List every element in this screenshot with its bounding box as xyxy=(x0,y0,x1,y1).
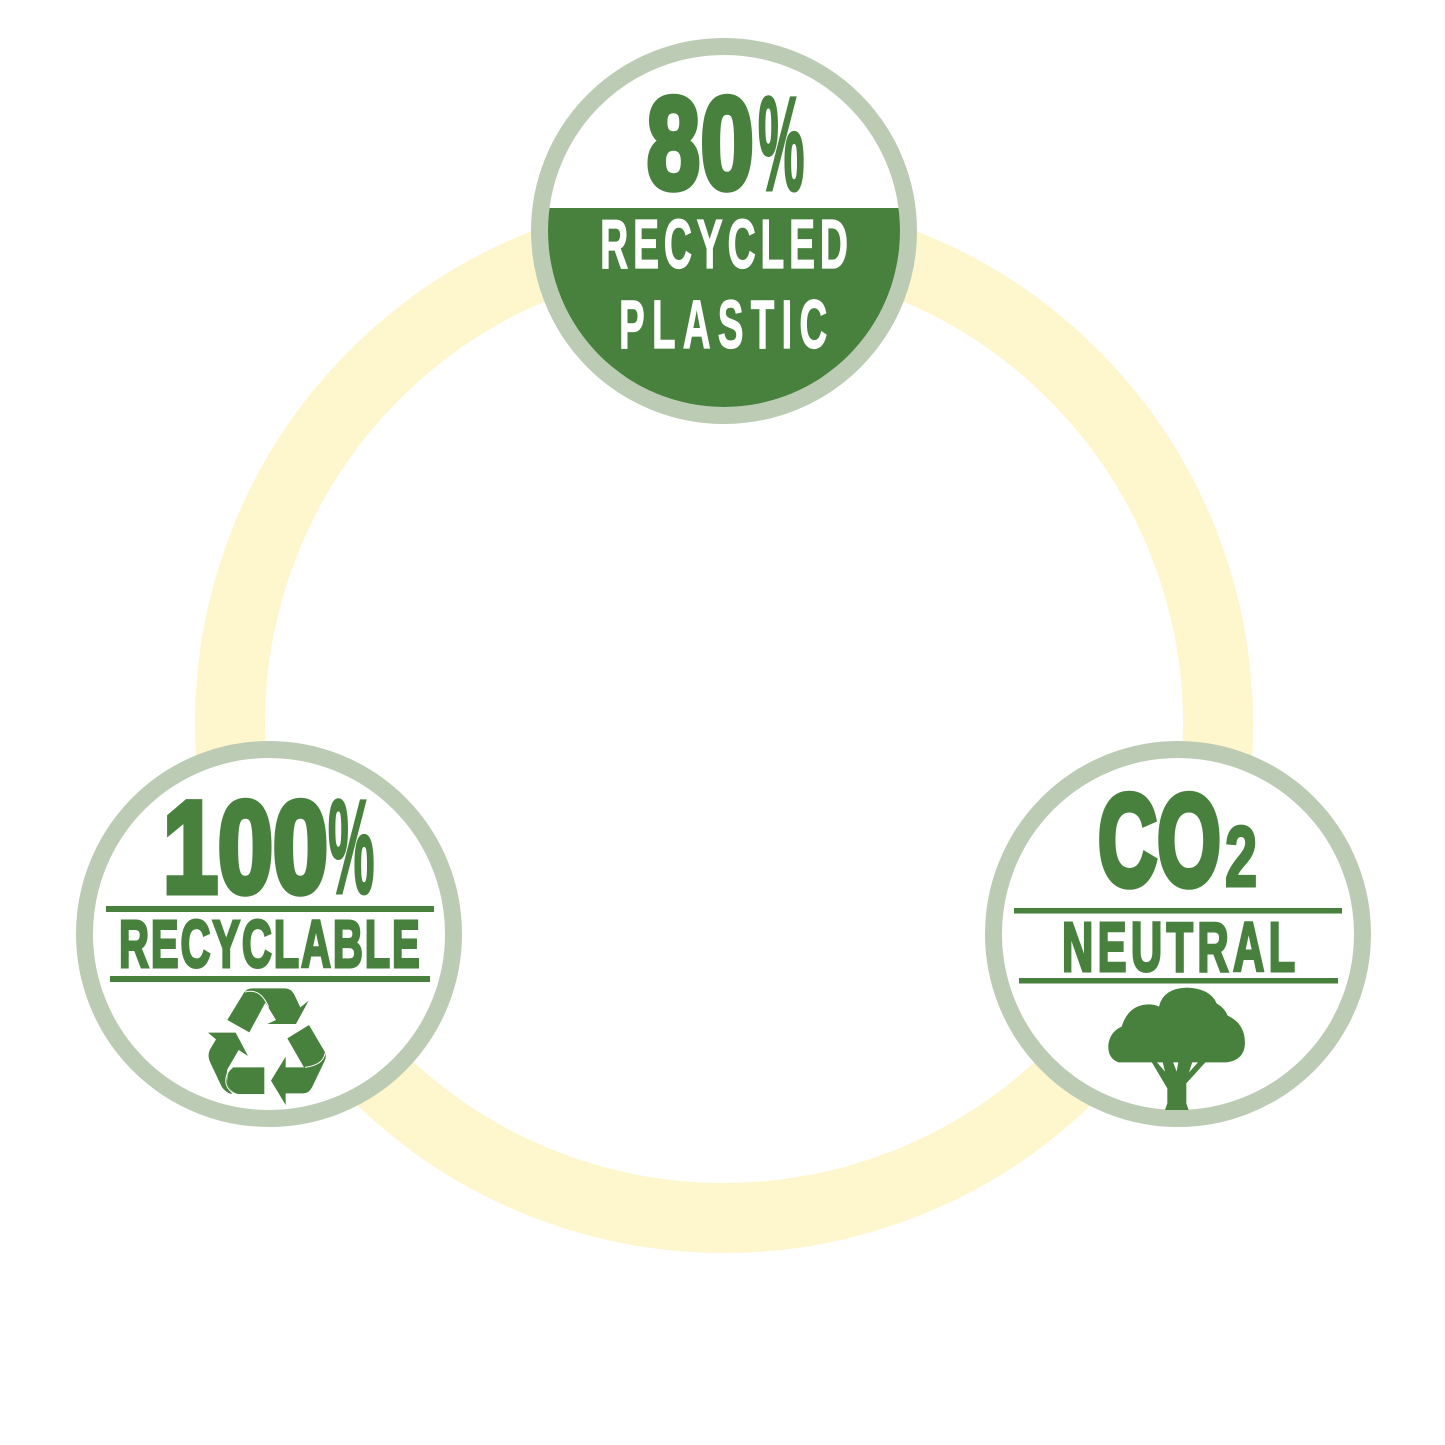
icon: recycling arrows xyxy=(208,988,326,1105)
panel: 80% recycled plastic badge xyxy=(540,46,908,418)
icon: tree xyxy=(1108,988,1245,1110)
upper rule xyxy=(106,906,434,912)
figure: 100%: % xyxy=(328,772,374,922)
badge disc xyxy=(84,750,454,1118)
yellow connecting ring xyxy=(230,230,1218,1218)
figure: 100%: 100 xyxy=(163,775,328,920)
figure: 80%: 80 xyxy=(647,71,754,217)
lower rule xyxy=(1019,978,1338,984)
panel: 100% recyclable badge xyxy=(84,750,454,1118)
label: neutral: NEUTRAL xyxy=(1062,908,1295,987)
figure: CO: CO xyxy=(1098,769,1221,914)
green lower segment xyxy=(540,208,908,418)
lower rule xyxy=(110,976,430,982)
figure: subscript 2: 2 xyxy=(1225,810,1257,905)
label: plastic: PLASTIC xyxy=(619,285,827,363)
label: recycled: RECYCLED xyxy=(600,206,848,284)
badge disc xyxy=(540,46,908,416)
badge disc xyxy=(994,750,1362,1118)
label: recyclable: RECYCLABLE xyxy=(119,907,420,981)
figure: 80% xyxy=(647,69,804,219)
upper rule xyxy=(1014,908,1342,914)
figure: 80%: % xyxy=(758,69,804,219)
panel: CO2 neutral badge xyxy=(994,750,1362,1118)
